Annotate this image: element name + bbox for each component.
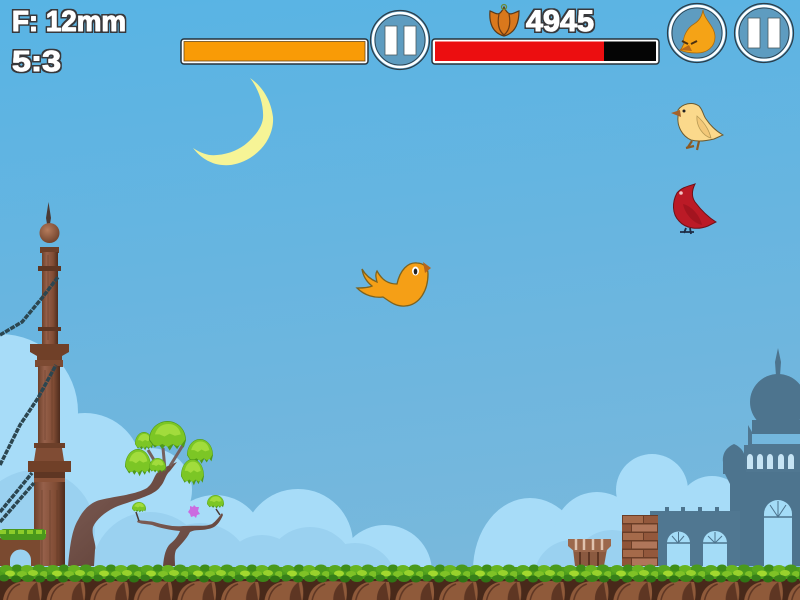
orange energy bar xyxy=(181,39,368,64)
text: aspect ratio: 5:3 xyxy=(12,46,61,78)
yellow bird xyxy=(671,103,723,150)
small tree with flower xyxy=(132,495,224,566)
large tree xyxy=(68,421,213,566)
chains xyxy=(0,277,58,522)
silhouette palace xyxy=(650,348,800,566)
text: focal length: F: 12mm xyxy=(12,6,126,38)
icon: purple flower xyxy=(188,505,200,518)
brick block xyxy=(622,515,658,566)
clouds: left group xyxy=(0,334,432,599)
main orange bird xyxy=(357,262,431,306)
clouds: right group xyxy=(473,454,747,578)
crescent moon xyxy=(193,78,273,165)
red bird xyxy=(673,184,716,234)
text: score: 4945 xyxy=(526,5,594,38)
clay pillar xyxy=(568,539,611,566)
fire bird button xyxy=(668,4,726,62)
minaret tower xyxy=(28,202,71,566)
pause button right xyxy=(734,4,794,62)
left ledge with arch xyxy=(0,529,46,566)
ground xyxy=(0,564,800,600)
pause button left xyxy=(370,10,430,70)
red health bar xyxy=(432,39,659,64)
icon: flower score xyxy=(490,4,519,36)
